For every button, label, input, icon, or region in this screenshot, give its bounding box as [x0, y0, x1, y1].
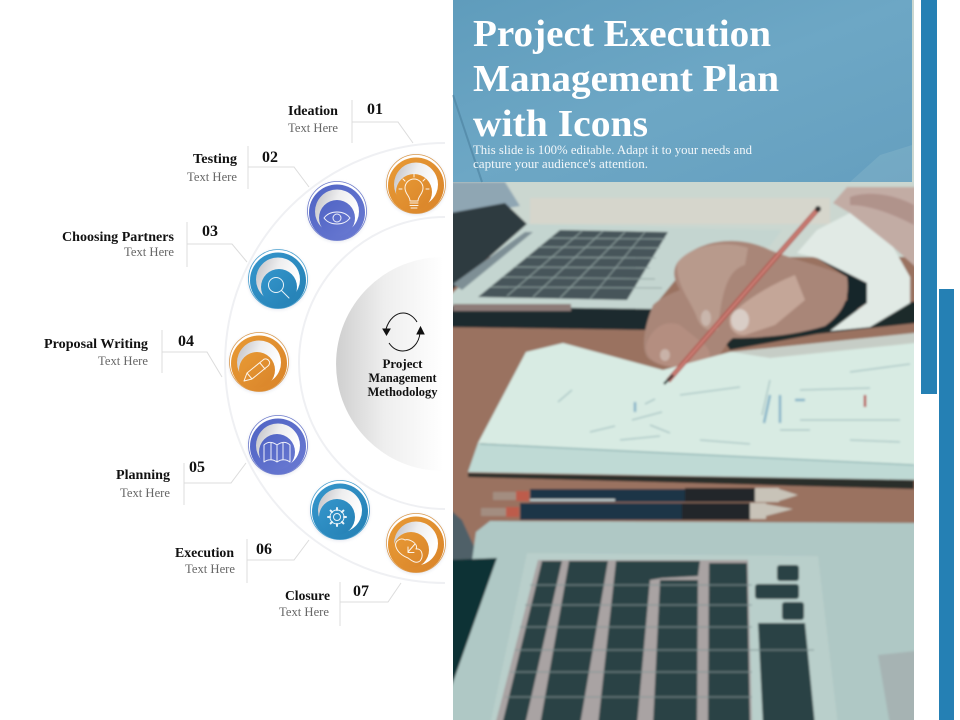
step 03: choosing partners: Text Here — [124, 245, 174, 259]
shadow under hand — [717, 300, 925, 350]
step 01: ideation: Ideation — [288, 104, 338, 119]
heading: Project Execution — [473, 13, 771, 55]
pens — [481, 488, 798, 520]
title banner — [453, 0, 912, 182]
paper sheets — [468, 443, 925, 480]
center text: Project — [382, 357, 423, 371]
rear hand — [833, 186, 914, 267]
decorative bars — [921, 0, 954, 720]
shirt cuff — [797, 213, 910, 331]
semicircle and methodology label — [336, 257, 443, 471]
front laptop — [453, 511, 475, 562]
step 01: ideation — [288, 100, 446, 215]
center text: Methodology — [368, 385, 438, 399]
icon: light bulb — [386, 154, 446, 215]
icon: eye — [307, 182, 367, 242]
step 03: choosing partners — [62, 222, 308, 310]
center text: Management — [368, 371, 437, 385]
heading — [473, 13, 779, 145]
pencil — [668, 209, 818, 381]
icon: cycle arrows — [383, 313, 424, 351]
heading: with Icons — [473, 103, 648, 145]
step 04: proposal writing: Proposal Writing — [44, 337, 148, 352]
step 02: testing: 02 — [262, 149, 278, 166]
keyboard keys — [502, 561, 815, 720]
icon: map — [248, 416, 308, 476]
step 06: execution: Execution — [175, 546, 234, 561]
icon: pencil — [229, 332, 289, 393]
hand — [644, 241, 848, 368]
step 05: planning — [116, 416, 308, 505]
step 02: testing — [187, 146, 367, 242]
step 07: closure: Closure — [285, 589, 330, 604]
heading: Management Plan — [473, 58, 779, 100]
step 02: testing: Testing — [193, 152, 237, 167]
step 06: execution: 06 — [256, 541, 272, 558]
step 06: execution — [175, 480, 370, 583]
icon: gear — [310, 480, 370, 541]
step 05: planning: Planning — [116, 468, 170, 483]
keyboard well — [495, 560, 752, 720]
subtitle: This slide is 100% editable. Adapt it to your needs and — [473, 143, 753, 157]
step 04: proposal writing: Text Here — [98, 354, 148, 368]
step 04: proposal writing — [44, 330, 289, 393]
step 03: choosing partners: Choosing Partners — [62, 230, 175, 245]
center text — [368, 357, 438, 399]
photo: desk with laptops, hand and pencil — [445, 0, 925, 720]
step 03: choosing partners: 03 — [202, 223, 218, 240]
step 07: closure — [279, 514, 446, 626]
step 04: proposal writing: 04 — [178, 333, 194, 350]
arcs — [225, 143, 445, 583]
icon: magnifier — [248, 250, 308, 310]
step 05: planning: Text Here — [120, 486, 170, 500]
icon: cloud download — [386, 514, 446, 574]
step 01: ideation: 01 — [367, 101, 383, 118]
subtitle — [473, 143, 753, 171]
step 05: planning: 05 — [189, 459, 205, 476]
dark edge under paper — [468, 473, 914, 489]
step 02: testing: Text Here — [187, 170, 237, 184]
subtitle: capture your audience's attention. — [473, 157, 648, 171]
step 01: ideation: Text Here — [288, 121, 338, 135]
step 06: execution: Text Here — [185, 562, 235, 576]
step 07: closure: Text Here — [279, 605, 329, 619]
step 07: closure: 07 — [353, 583, 369, 600]
rear keyboard — [478, 230, 668, 300]
